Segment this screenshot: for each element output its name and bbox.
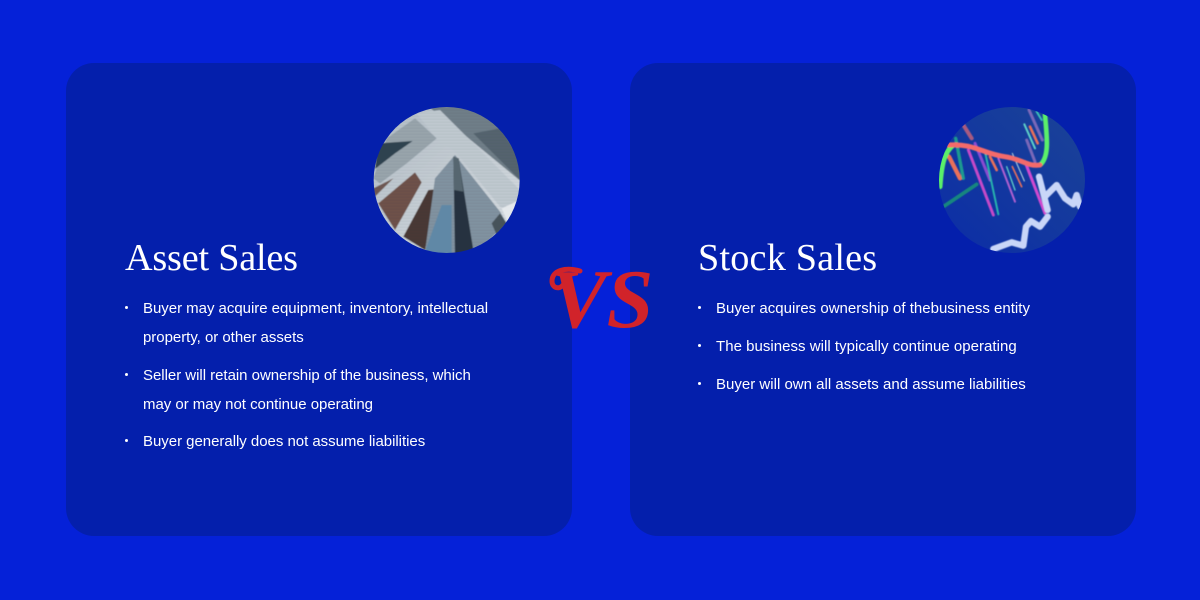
list: asset sales points <box>125 300 488 450</box>
vs text: VS <box>551 253 653 346</box>
bullet: assets and liabilities: Buyer will own all assets and assume liabilities <box>716 376 1026 393</box>
heading: asset sales: Asset Sales <box>125 237 298 279</box>
bullet: ownership: Buyer acquires ownership of thebusiness entity <box>716 300 1030 317</box>
bullet: seller retains <box>143 361 471 419</box>
panel: stock sales <box>630 63 1136 536</box>
photo: stock chart <box>939 107 1085 253</box>
bullet: acquire assets: property, or other assets <box>143 329 304 346</box>
bullet: seller retains: Seller will retain ownership of the business, which <box>143 367 471 384</box>
list: stock sales points <box>698 300 1030 393</box>
bullet: liabilities: Buyer generally does not assume liabilities <box>143 433 425 450</box>
photo: skyscrapers <box>374 107 520 253</box>
panel: asset sales <box>66 63 572 536</box>
bullet: continues operating: The business will typically continue operating <box>716 338 1017 355</box>
bullet: acquire assets <box>143 294 488 352</box>
bullet: acquire assets: Buyer may acquire equipment, inventory, intellectual <box>143 300 488 317</box>
vs label <box>550 253 653 346</box>
bullet: seller retains: may or may not continue operating <box>143 396 373 413</box>
heading: stock sales: Stock Sales <box>698 237 877 279</box>
